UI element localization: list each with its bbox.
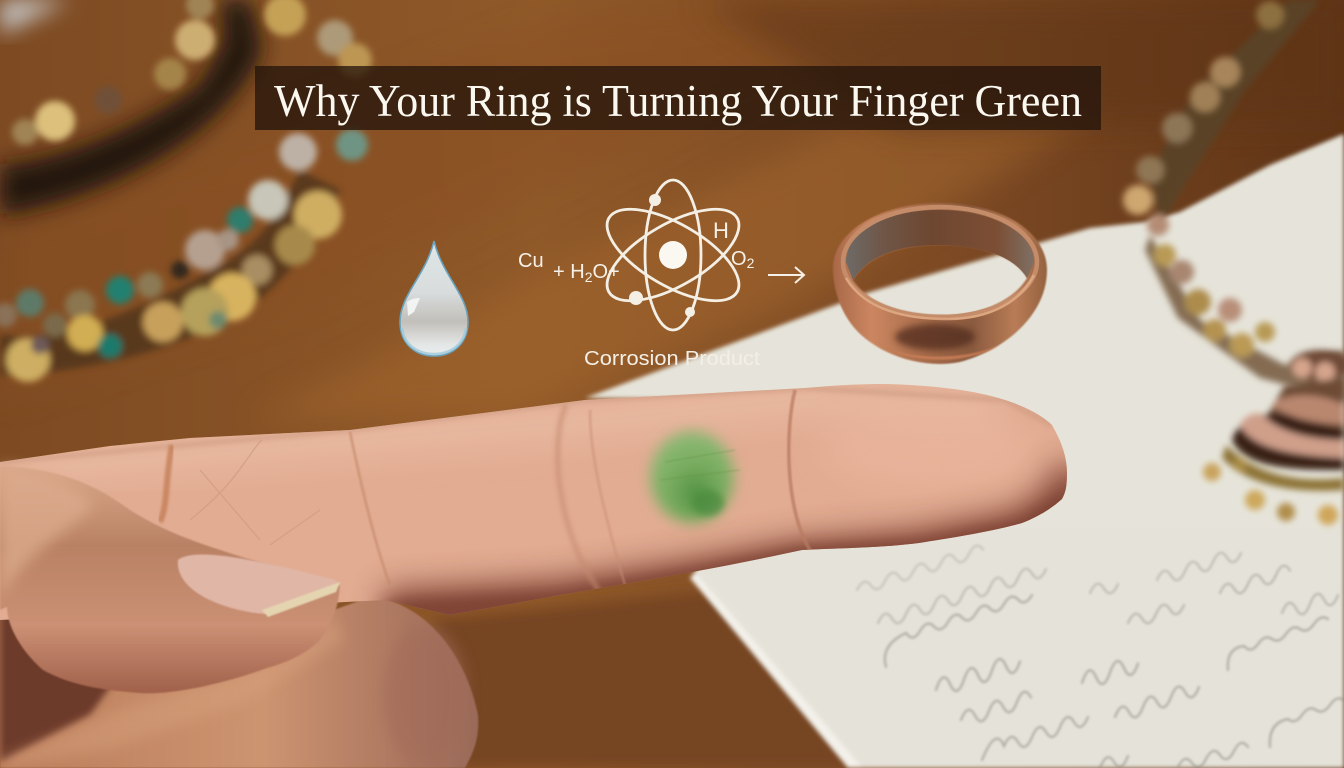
chemical equation: H <box>713 218 729 243</box>
chemical equation: + H <box>553 261 585 283</box>
green corrosion stain <box>650 431 740 523</box>
handwriting on notebook page <box>857 546 1344 768</box>
blurred necklace, middle left <box>0 129 368 382</box>
icon: water drop <box>400 241 468 356</box>
copper ring <box>833 203 1047 364</box>
blurred pendant, right <box>1203 350 1344 525</box>
chemical equation <box>518 218 755 285</box>
chemical equation: 2 <box>585 269 593 285</box>
chemical equation: O <box>731 248 747 270</box>
chemical equation: 2 <box>747 255 755 271</box>
arrow <box>768 267 804 283</box>
chemical equation: Cu <box>518 250 544 272</box>
hand: lower finger <box>0 595 478 768</box>
hand: pointing finger <box>0 380 1100 625</box>
blurred necklace, upper left <box>0 0 372 215</box>
title banner: Why Your Ring is Turning Your Finger Green <box>274 76 1082 126</box>
icon: atom <box>593 180 753 330</box>
open notebook <box>585 134 1344 768</box>
chemical equation: O+ <box>592 261 620 283</box>
hand: thumb with nail <box>0 466 340 693</box>
label: corrosion product: Corrosion Product <box>584 348 760 370</box>
blurred necklace, right <box>1123 0 1344 400</box>
